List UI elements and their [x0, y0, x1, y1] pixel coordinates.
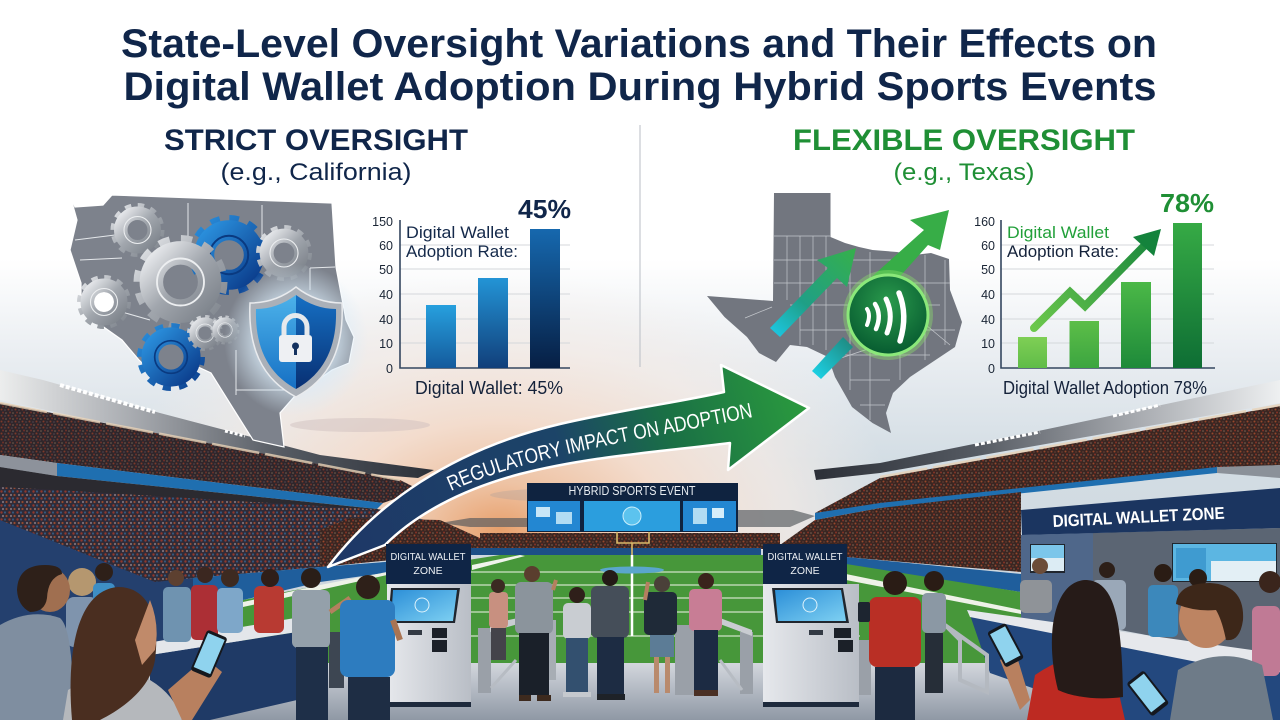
chart: flexible oversight bars: 0 — [988, 362, 995, 376]
chart: strict oversight bars: 50 — [379, 263, 393, 277]
strict oversight heading: (e.g., California) — [220, 159, 412, 186]
boy with phone — [1126, 583, 1273, 720]
flexible oversight heading: FLEXIBLE OVERSIGHT — [793, 124, 1135, 157]
gear — [141, 327, 201, 387]
blonde woman in stands — [66, 568, 98, 647]
left counter — [147, 618, 297, 720]
title: Digital Wallet Adoption During Hybrid Sports Events — [124, 65, 1156, 109]
man in red shirt — [858, 571, 921, 720]
chart: strict oversight bars: Digital Wallet: 45% — [415, 378, 563, 398]
strict oversight heading — [164, 124, 468, 186]
gear — [259, 228, 309, 278]
trend arrow — [1034, 229, 1161, 328]
title — [121, 22, 1157, 109]
large growth arrow, upper segment — [866, 210, 949, 282]
small growth arrow — [770, 248, 856, 337]
right stadium stands — [773, 380, 1280, 592]
chart: flexible oversight bars: Digital Wallet — [1007, 223, 1109, 242]
gear — [80, 278, 128, 326]
far stands behind the field — [193, 510, 815, 612]
gear — [114, 206, 161, 254]
left stadium stands — [0, 370, 504, 720]
phone — [987, 623, 1024, 668]
right wallet zone booth — [967, 488, 1280, 720]
arrow label: REGULATORY IMPACT ON ADOPTION — [446, 403, 752, 490]
chart: flexible oversight bars: 40 — [981, 288, 995, 302]
kiosk sign: DIGITAL WALLET — [768, 551, 843, 563]
right digital wallet kiosk — [763, 544, 859, 707]
chart: flexible oversight bars: 50 — [981, 263, 995, 277]
man seen from behind — [0, 565, 73, 720]
kiosk sign — [386, 544, 471, 584]
floor — [150, 663, 1150, 720]
map outline — [707, 193, 962, 433]
kiosk screen — [388, 588, 460, 623]
man in dark shirt — [591, 570, 629, 700]
spectators at the field — [489, 566, 722, 701]
chart: strict oversight bars: 60 — [379, 239, 393, 253]
goal post — [617, 532, 649, 555]
foreground people, left — [0, 565, 228, 720]
chart: flexible oversight bars: 10 — [981, 337, 995, 351]
chart: strict oversight bars: Adoption Rate: — [406, 242, 518, 261]
woman with phone — [63, 587, 228, 720]
woman in pink shirt — [689, 573, 722, 696]
flexible oversight heading: (e.g., Texas) — [894, 159, 1034, 186]
kiosk screen — [772, 588, 849, 623]
man in blue shirt — [340, 575, 400, 720]
left state map with gears and shield — [70, 195, 368, 447]
scoreboard — [527, 483, 738, 532]
chart: strict oversight bars — [372, 194, 571, 398]
contactless payment badge — [843, 270, 933, 360]
chart: flexible oversight bars: Adoption Rate: — [1007, 242, 1119, 261]
left digital wallet kiosk — [386, 544, 471, 707]
woman in navy shirt — [644, 576, 677, 693]
booth large screen — [1172, 543, 1277, 582]
gear — [139, 241, 222, 323]
chart: flexible oversight bars: 40 — [981, 313, 995, 327]
map outline — [70, 195, 354, 447]
chart: strict oversight bars: Digital Wallet — [406, 223, 509, 242]
chart: flexible oversight bars: 78% — [1160, 188, 1214, 218]
kiosk sign — [763, 544, 847, 584]
kiosk sign: ZONE — [413, 565, 443, 577]
chart: strict oversight bars: 10 — [379, 337, 393, 351]
gear — [194, 220, 264, 290]
turnstile gates — [329, 618, 987, 695]
man in grey shirt — [515, 566, 556, 701]
kiosk sign: ZONE — [790, 565, 820, 577]
man in grey shirt — [292, 568, 350, 720]
foreground people, right — [987, 580, 1273, 720]
chart: flexible oversight bars: 60 — [981, 239, 995, 253]
football field — [243, 555, 1021, 663]
phone — [1126, 670, 1169, 717]
flexible oversight heading — [793, 124, 1135, 186]
woman in grey shirt — [922, 571, 946, 693]
chart: strict oversight bars: 0 — [386, 362, 393, 376]
shield with padlock — [224, 264, 368, 416]
booth sign — [1021, 488, 1280, 535]
kiosk sign: DIGITAL WALLET — [390, 551, 466, 563]
large growth arrow, lower segment — [812, 337, 853, 379]
staff at left counter — [163, 567, 284, 642]
scoreboard heading: HYBRID SPORTS EVENT — [568, 483, 696, 498]
people at the kiosks — [66, 558, 1280, 720]
woman in white shirt — [563, 587, 591, 697]
chart: strict oversight bars: 45% — [518, 194, 571, 224]
gear — [212, 317, 238, 343]
chart: flexible oversight bars: Digital Wallet Adoption 78% — [1003, 378, 1207, 398]
chart: flexible oversight bars: 160 — [974, 215, 995, 229]
staff at right booth — [1020, 558, 1280, 676]
strict oversight heading: STRICT OVERSIGHT — [164, 124, 468, 157]
booth sign: DIGITAL WALLET ZONE — [1052, 504, 1225, 531]
chart: strict oversight bars: 40 — [379, 313, 393, 327]
chart: flexible oversight bars — [974, 188, 1215, 398]
title: State-Level Oversight Variations and Their Effects on — [121, 22, 1157, 66]
chart: strict oversight bars: 150 — [372, 215, 393, 229]
regulatory impact arrow — [326, 364, 810, 568]
chart: strict oversight bars: 40 — [379, 288, 393, 302]
Texas map with arrows — [707, 193, 962, 433]
woman in pink, far left — [489, 579, 508, 660]
woman with phone — [987, 580, 1125, 720]
booth small screen — [1030, 544, 1065, 573]
gear — [189, 317, 221, 349]
phone — [190, 629, 228, 679]
man in stands — [93, 563, 115, 607]
